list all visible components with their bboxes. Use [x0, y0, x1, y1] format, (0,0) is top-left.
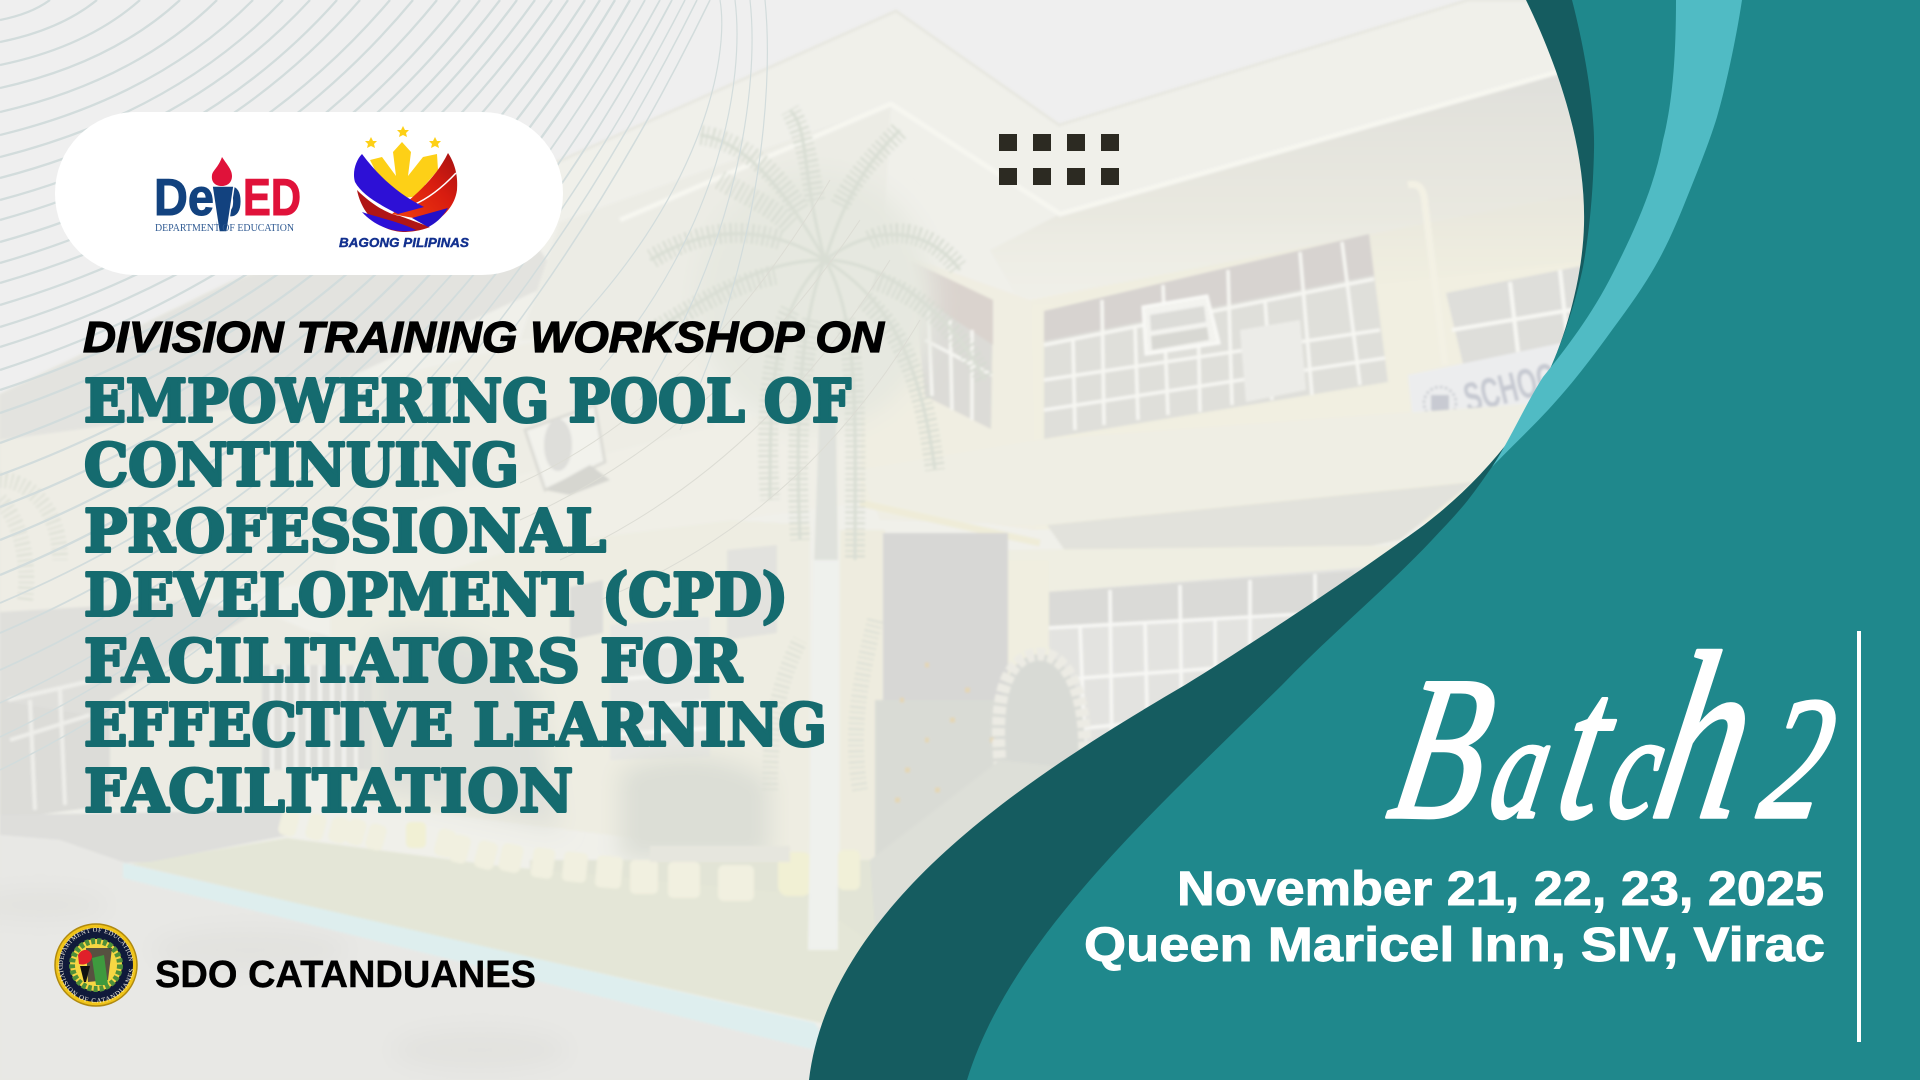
main title: FACILITATORS FOR — [84, 626, 743, 696]
lower red band — [357, 190, 430, 232]
seal: SDO Catanduanes — [54, 923, 138, 1007]
base below garden — [530, 860, 880, 1020]
palm fronds — [640, 110, 985, 560]
batch heading: 2 — [1748, 662, 1849, 856]
lower window — [1047, 566, 1380, 760]
batch heading: h — [1638, 603, 1776, 869]
road upper left — [0, 810, 290, 863]
decorative curved line pattern — [0, 0, 920, 770]
second eave line — [620, 60, 1600, 220]
batch heading: c — [1597, 683, 1678, 850]
main title: PROFESSIONAL — [84, 496, 606, 566]
torch flame — [212, 157, 232, 186]
logo: Bagong Pilipinas — [339, 126, 469, 250]
left roof shadow wedge — [0, 190, 560, 520]
main title: FACILITATION — [84, 756, 573, 826]
drain pipe — [1408, 184, 1445, 365]
batch heading: t — [1543, 631, 1634, 863]
school sign — [1408, 335, 1600, 439]
logo pill — [55, 112, 563, 275]
ledge underside line — [860, 503, 1040, 543]
garden right of trunk — [840, 760, 1090, 1010]
centre windows — [727, 545, 777, 640]
venue line: Queen Maricel Inn, SIV, Virac — [1084, 919, 1825, 972]
canopy — [1047, 482, 1473, 562]
main title: CONTINUING — [84, 430, 519, 500]
palm trunk — [808, 420, 838, 950]
subtitle: DIVISION TRAINING WORKSHOP ON — [83, 313, 885, 362]
grass — [123, 838, 880, 1025]
logo: DepEd: p — [214, 169, 242, 227]
teal wave: light ribbon — [1492, 0, 1742, 467]
red sash — [392, 153, 457, 222]
balcony slab — [330, 390, 860, 610]
main upper window — [1044, 234, 1388, 439]
blue sash — [354, 154, 424, 214]
palm frond midribs — [640, 110, 985, 560]
left gable wing soffit — [520, 104, 891, 340]
logo: DepEd — [154, 157, 301, 234]
left cream panels — [110, 610, 330, 810]
garden plants left of trunk — [370, 631, 770, 860]
left cream wall — [0, 300, 720, 620]
curb — [123, 863, 828, 1050]
lower wall — [1008, 545, 1430, 900]
left wing upper window — [911, 261, 993, 429]
painted garden stones — [277, 808, 860, 901]
lower palms — [0, 480, 875, 790]
grotto arch — [998, 654, 1085, 780]
wall below balcony — [330, 520, 810, 860]
seal: SDO Catanduanes: DEPARTMENT OF EDUCATION — [58, 928, 134, 965]
teal wave: dark layer — [809, 0, 1920, 1080]
logo: DepEd: De — [154, 169, 214, 227]
sun — [370, 142, 438, 198]
school sign: SCHOOL — [1459, 350, 1577, 422]
pavement — [0, 835, 830, 1080]
first floor ledge — [860, 400, 1580, 525]
teal wave: main panel — [967, 0, 1920, 1080]
main title — [84, 366, 851, 826]
palm canopy shade — [695, 170, 935, 430]
date line: November 21, 22, 23, 2025 — [1177, 863, 1824, 916]
main title: DEVELOPMENT (CPD) — [84, 560, 788, 630]
decorative dot grid — [999, 134, 1119, 185]
logo: DepEd: ED — [243, 169, 301, 227]
brick planter — [650, 846, 790, 862]
seal: SDO Catanduanes: DIVISION OF CATANDUANES — [58, 964, 134, 1003]
logo: DepEd: DEPARTMENT OF EDUCATION — [155, 223, 294, 234]
soffit under second eave — [990, 60, 1600, 320]
right upper window — [1446, 262, 1600, 364]
dark doorway and shrubs — [875, 533, 1015, 940]
stars — [365, 126, 441, 148]
main title: EFFECTIVE LEARNING — [84, 690, 827, 760]
cream wall, left wing — [860, 240, 1035, 530]
lower blue band — [362, 212, 416, 231]
cream wall, right wing — [1030, 190, 1600, 530]
split AC unit — [525, 405, 605, 490]
pavement shadows — [0, 889, 570, 1072]
torch — [212, 186, 234, 232]
vertical divider — [1857, 631, 1861, 1042]
organisation name: SDO CATANDUANES — [155, 954, 536, 996]
cream column — [1008, 560, 1049, 690]
left grey ledge and shade — [0, 600, 340, 720]
window air-conditioner — [1143, 296, 1219, 354]
batch heading: a — [1479, 683, 1566, 850]
wall column beside trunk — [840, 530, 885, 860]
logo: Bagong Pilipinas: BAGONG PILIPINAS — [339, 235, 469, 250]
batch heading: B — [1376, 636, 1510, 862]
iron grille window left — [262, 665, 372, 770]
main title: EMPOWERING POOL OF — [84, 366, 851, 436]
